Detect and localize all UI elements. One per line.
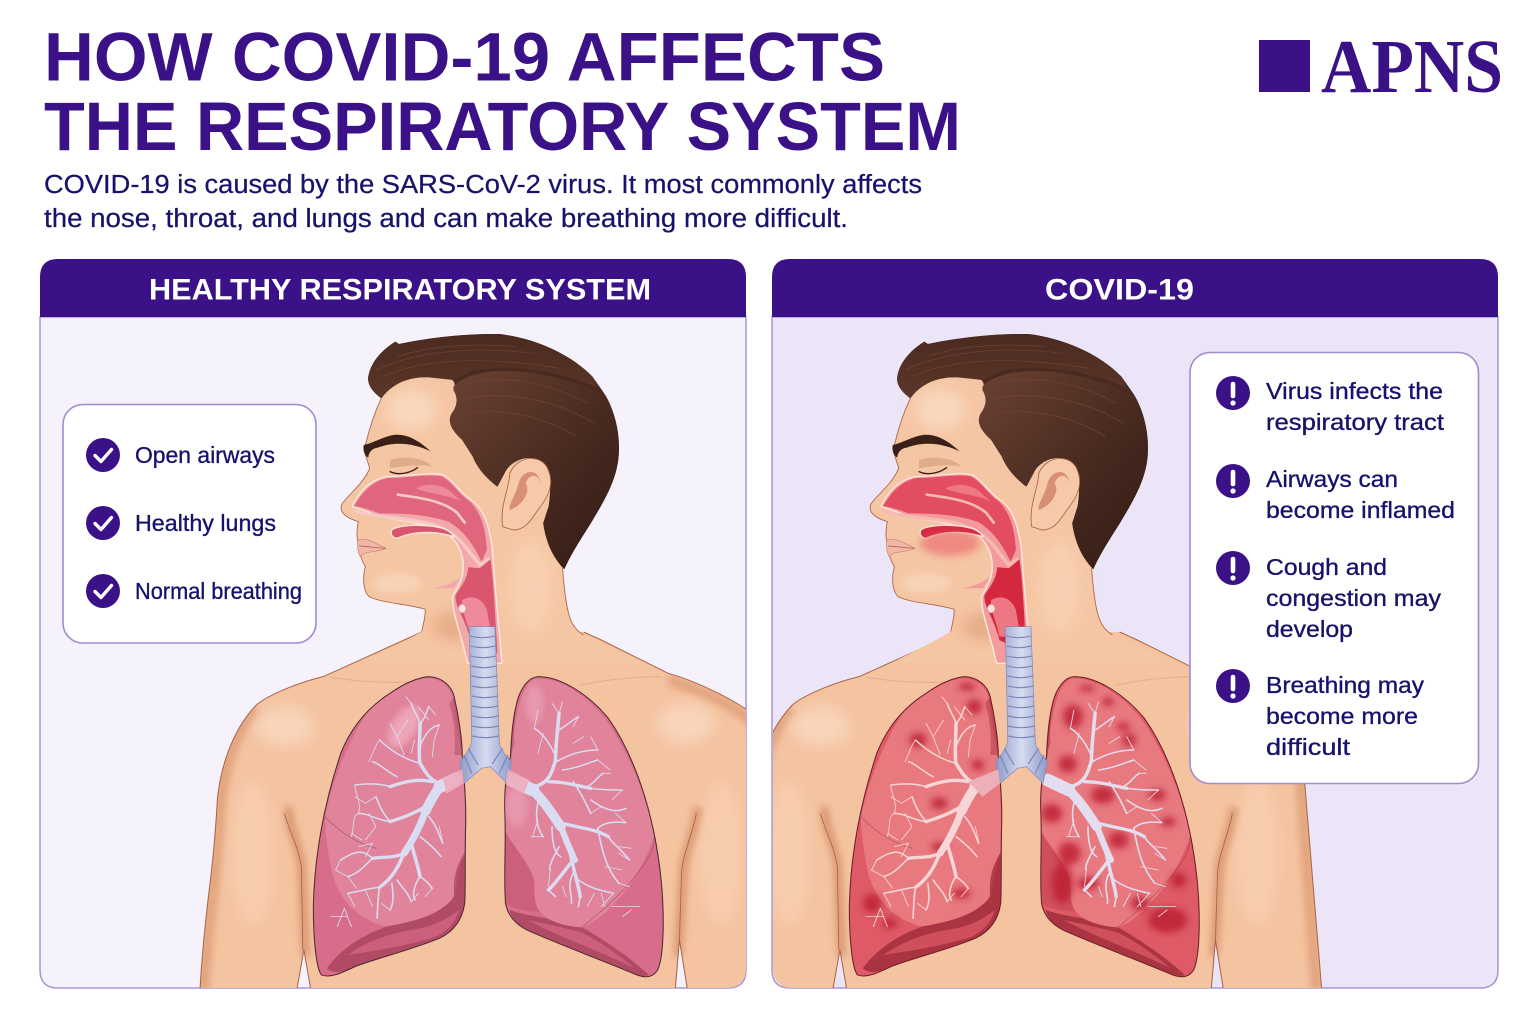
item: healthy lungs: Healthy lungs xyxy=(135,510,276,536)
item: open airways: Open airways xyxy=(135,442,275,468)
panel header xyxy=(772,259,1498,317)
panel header: HEALTHY RESPIRATORY SYSTEM xyxy=(149,274,651,306)
item: airways can become inflamed: become inflamed xyxy=(1266,497,1455,523)
head with inflamed airway xyxy=(870,334,1173,663)
illustration: infected anatomy xyxy=(736,334,1322,990)
item: airways can become inflamed: Airways can xyxy=(1266,466,1398,492)
item: virus infects the respiratory tract xyxy=(1216,376,1445,435)
panel: covid-19 xyxy=(736,259,1498,990)
callout: covid symptoms xyxy=(1190,352,1478,784)
item: normal breathing: Normal breathing xyxy=(135,578,302,604)
intro text: COVID-19 is caused by the SARS-CoV-2 virus. It most commonly affects xyxy=(44,171,922,199)
item: breathing may become more difficult xyxy=(1216,669,1424,760)
item: cough and congestion may develop: congestion may xyxy=(1266,585,1441,611)
item: cough and congestion may develop: Cough and xyxy=(1266,554,1387,580)
item: breathing may become more difficult: difficult xyxy=(1266,734,1351,760)
item: normal breathing xyxy=(86,574,302,608)
logo: APNS xyxy=(1259,25,1503,109)
title: THE RESPIRATORY SYSTEM xyxy=(44,88,961,165)
intro text xyxy=(44,171,922,233)
bronchus overlay xyxy=(443,769,529,794)
item: cough and congestion may develop xyxy=(1216,551,1441,642)
intro text: the nose, throat, and lungs and can make breathing more difficult. xyxy=(44,205,848,233)
item: breathing may become more difficult: become more xyxy=(1266,703,1418,729)
item: airways can become inflamed xyxy=(1216,464,1455,523)
healthy lungs xyxy=(313,627,663,977)
panel background xyxy=(40,317,746,988)
inflamed lungs xyxy=(849,627,1199,977)
inflammation around the mouth xyxy=(920,530,980,556)
bronchus overlay xyxy=(968,769,1000,797)
item: cough and congestion may develop: develop xyxy=(1266,616,1353,642)
head with airway xyxy=(341,334,644,663)
item: virus infects the respiratory tract: Virus infects the xyxy=(1266,378,1443,404)
illustration: healthy anatomy xyxy=(200,334,786,990)
panel background xyxy=(772,317,1498,988)
title xyxy=(44,18,961,165)
item: breathing may become more difficult: Breathing may xyxy=(1266,672,1424,698)
item: open airways xyxy=(86,438,275,472)
title: HOW COVID-19 AFFECTS xyxy=(44,18,885,96)
item: healthy lungs xyxy=(86,506,276,540)
panel header: COVID-19 xyxy=(1045,274,1194,306)
panel header xyxy=(40,259,746,317)
logo: APNS: APNS xyxy=(1321,25,1503,109)
callout: healthy checklist xyxy=(63,404,316,643)
torso xyxy=(736,632,1322,990)
torso xyxy=(200,632,786,990)
panel: healthy respiratory system xyxy=(40,259,786,990)
item: virus infects the respiratory tract: respiratory tract xyxy=(1266,409,1445,435)
